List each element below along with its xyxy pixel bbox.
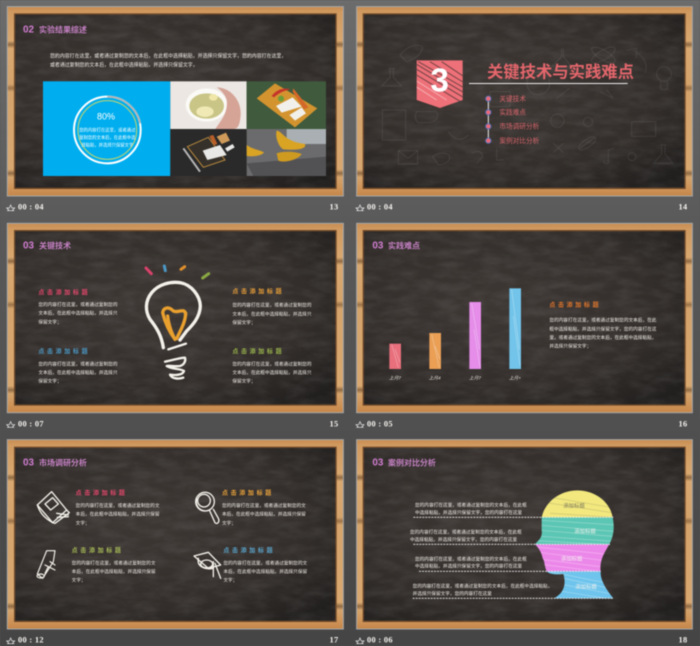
heading: 实验结果综述 [39,24,87,34]
text block: orange: 文本后，在此框中选择粘贴，并选择只 [232,310,312,317]
text block: orange: 您的内容打在这里，或者通过复制您的文 [222,502,306,509]
text block: orange [232,288,312,326]
callout row 1 [413,501,613,517]
text block: green: 本后，在此框中选择粘贴，并选择只保留 [72,568,156,575]
callout row 3: 您的内容打在这里，或者通过复制您的文本后，在此框 [415,555,527,562]
bar chart: 上月+ [509,376,521,381]
panel: slide 13 results summary [7,7,343,212]
text block: red: 文字； [76,519,90,526]
footer: duration: 00 : 04 [18,203,44,212]
head silhouette chart: 添加标题 [575,583,597,591]
section number: 02 [23,24,34,35]
chalkboard [363,447,685,621]
text block: blue: 您的内容打在这里，或者通过复制您的文 [223,559,307,566]
wooden frame [7,223,343,413]
icon: diploma scroll [37,551,55,578]
text block: green [72,546,156,584]
blue progress tile: 80% [97,111,115,121]
icon: book [37,492,69,523]
blue progress tile: 复制您的文本后，在此框中选 [79,134,136,141]
text block: red: 文本后，在此框中选择粘贴，并选择只 [38,310,118,317]
intro text: 或者通过复制您的文本后，在此框中选择粘贴，并选择只保留文字， [50,61,198,68]
footer: duration: 00 : 04 [367,203,393,212]
heading: 市场调研分析 [39,457,87,467]
icon: magnifying glass [196,492,219,523]
chalkboard [15,14,336,188]
text block: green: 点击添加标题 [232,348,284,356]
text block: green: 您的内容打在这里，或者通过复制您的文 [72,559,156,566]
callout row 3: 中选择粘贴，并选择只保留文字，您的内容打在这里 [415,563,522,570]
footer: duration: 00 : 06 [367,636,393,645]
wooden frame [7,440,343,629]
text block: blue: 保留文字； [38,378,62,385]
wooden frame [7,7,343,196]
text block: red: 点击添加标题 [76,489,128,497]
text block: green: 您的内容打在这里，或者通过复制您的 [232,360,312,367]
text block: blue: 文字； [223,577,237,584]
text block: 您的内容打在这里，或者通过复制您的文本后，在此 [549,317,657,324]
panel: slide 15 key technology [7,223,343,428]
text block: red: 您的内容打在这里，或者通过复制您的文 [76,502,160,509]
text block: green: 文本后，在此框中选择粘贴，并选择只 [232,369,312,376]
number badge [415,60,465,108]
text block: green: 点击添加标题 [72,546,124,554]
text block: blue [38,348,118,385]
text block: 里，或者通过复制您的文本后，在此框中选择粘贴， [549,334,656,341]
callout row 4: 您的内容打在这里，或者通过复制您的文本后，在此框中选择粘贴， [413,583,552,590]
head silhouette chart: 添加标题 [561,555,583,563]
callout row 4 [413,583,613,598]
panel: slide 18 case comparison [356,440,692,645]
text block: orange: 点击添加标题 [222,489,274,497]
title underline [469,82,628,85]
panel: slide 17 market research [7,440,343,645]
text block: red: 您的内容打在这里，或者通过复制您的 [38,301,118,308]
head silhouette chart: 添加标题 [563,501,585,509]
contents timeline: 案例对比分析 [499,136,540,145]
callout row 2: 中选择粘贴，并选择只保留文字，您的内容打在这里 [410,536,517,543]
head silhouette chart: 添加标题 [574,527,596,535]
section number: 03 [23,241,34,252]
text block: red [76,489,160,526]
page number: 13 [329,203,338,212]
text block: blue: 本后，在此框中选择粘贴，并选择只保留 [223,568,307,575]
text block: blue: 点击添加标题 [223,546,275,554]
wooden frame [357,223,692,413]
wooden frame [357,7,692,196]
page number: 14 [678,203,688,212]
footer: duration: 00 : 05 [367,419,393,428]
footer: duration [7,636,44,645]
callout row 4: 并选择只保留文字，您的内容打在这里 [413,590,492,597]
text block: blue: 您的内容打在这里，或者通过复制您的 [38,360,118,367]
text block: orange [222,489,306,526]
panel: slide 14 section divider [356,7,692,212]
contents timeline [486,94,540,145]
chalkboard [15,447,336,621]
text block [549,301,657,350]
icon: chalk light bulb [146,282,200,379]
text block: green: 文字； [72,577,86,584]
heading: 案例对比分析 [388,457,436,467]
blue progress tile: 您的内容打在这里，或者通过 [79,127,136,134]
footer: duration [356,203,393,212]
head silhouette chart [533,490,617,600]
photo: stationery [170,129,247,176]
text block: red [38,288,118,325]
bar chart: 上月7 [469,376,481,381]
page number: 17 [329,636,338,645]
text block: red: 点击添加标题 [38,288,90,296]
callout row 1: 您的内容打在这里，或者通过复制您的文本后，在此框 [415,501,527,508]
text block: blue: 点击添加标题 [38,348,90,356]
intro text [50,53,286,68]
page number: 16 [678,419,687,428]
bar chart: 上月7 [389,376,401,381]
number badge: 3 [430,63,449,100]
blue progress tile [43,81,170,176]
section title: 关键技术与实践难点 [487,62,634,81]
heading: 关键技术 [39,241,71,251]
bar chart [389,288,521,381]
text block: orange: 点击添加标题 [232,288,284,296]
page number: 15 [329,419,338,428]
heading: 实践难点 [388,241,420,251]
contents timeline: 关键技术 [499,94,526,103]
footer: duration: 00 : 12 [18,636,44,645]
chalk marks: four colours [146,266,209,278]
footer: duration [7,203,44,212]
intro text: 您的内容打在这里，或者通过复制您的文本后，在此框中选择粘贴，并选择只保留文字，您的内容打在这里， [50,53,286,60]
text block: orange: 您的内容打在这里，或者通过复制您的 [232,302,312,309]
photo: lemon bowl [170,81,247,129]
text block: 并选择只保留文字； [549,343,591,350]
callout row 1: 中选择粘贴，并选择只保留文字，您的内容打在这里 [415,509,522,516]
section number: 03 [372,241,384,252]
text block: red: 本后，在此框中选择粘贴，并选择只保留 [76,511,160,518]
text block: 点击添加标题 [549,301,601,309]
callout row 2 [410,529,610,544]
wooden frame [357,440,692,629]
callout row 2: 您的内容打在这里，或者通过复制您的文本后，在此框 [410,529,522,536]
faint chalk doodles [382,44,673,165]
contents timeline: 市场调研分析 [499,121,540,130]
text block: blue: 文本后，在此框中选择粘贴，并选择只 [38,369,118,376]
footer: duration [7,419,44,428]
chalkboard [363,14,685,188]
photo: yellow chairs [247,129,326,176]
text block: red: 保留文字； [38,318,62,325]
callout row 3 [415,555,601,571]
text block: blue [223,546,307,584]
page number: 18 [678,636,687,645]
text block: green [232,348,312,385]
section number: 03 [372,457,384,468]
text block: green: 保留文字； [232,378,256,385]
bar chart: 上月4 [429,376,441,381]
blue progress tile: 择粘贴，并选择只保留文字 [81,142,134,149]
chalkboard [363,231,685,405]
chalkboard [15,231,336,405]
section number: 03 [23,457,34,468]
text block: orange: 文字； [222,519,236,526]
icon: graduation cap [194,552,221,578]
panel: slide 16 practice difficulties [356,223,692,428]
contents timeline: 实践难点 [499,107,526,116]
text block: orange: 本后，在此框中选择粘贴，并选择只保留 [222,511,306,518]
footer: duration: 00 : 07 [18,419,44,428]
text block: orange: 保留文字； [232,319,256,326]
text block: 框中选择粘贴，并选择只保留文字，您的内容打在这 [549,325,657,332]
photo: cutting board [247,81,326,129]
